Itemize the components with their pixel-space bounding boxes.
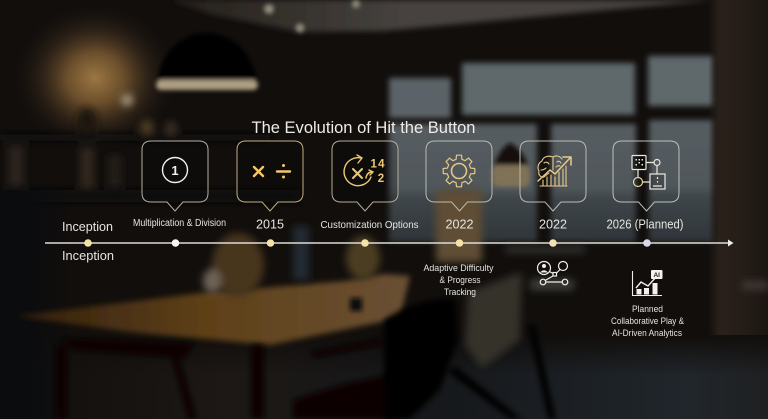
callout frame 1 <box>142 141 208 211</box>
background: floor <box>0 335 768 419</box>
background: warm column in window <box>436 190 482 262</box>
text block: planned collaborative play and AI analytics: AI-Driven Analytics <box>612 328 682 339</box>
icon: brain with growth chart <box>538 156 571 186</box>
background: table legs and chairs <box>56 338 400 419</box>
background: left dark edge <box>0 190 70 419</box>
text block: adaptive difficulty <box>424 263 494 298</box>
icon: AI analytics chart: AI <box>653 272 660 279</box>
timeline dots <box>84 239 651 247</box>
timeline axis with arrow <box>45 240 734 246</box>
text block: planned collaborative play and AI analytics: Planned <box>632 304 663 315</box>
icon: numbered circle: 1 <box>171 163 179 178</box>
background: white chair <box>465 272 522 368</box>
text block: planned collaborative play and AI analytics <box>611 304 685 339</box>
background: floor top fade <box>0 335 768 375</box>
icon: gear <box>443 155 475 187</box>
callout: customization options milestone <box>332 141 398 211</box>
icon: user network <box>538 262 568 285</box>
background: dome lamp <box>156 33 258 90</box>
background: pendant lamp reflection <box>492 143 530 187</box>
callout frame 2 <box>237 141 303 211</box>
callout: multiplication and division milestone <box>142 141 208 211</box>
callout frame 5 <box>520 141 586 211</box>
text block: adaptive difficulty: & Progress <box>440 275 481 286</box>
label: 2015: 2015 <box>256 216 284 232</box>
text block: adaptive difficulty: Tracking <box>444 287 476 298</box>
label: 2022 second: 2022 <box>539 216 567 232</box>
callout: progress tracking milestone <box>520 141 586 211</box>
icon: customization cycle: 2 <box>378 173 384 185</box>
title: The Evolution of Hit the Button <box>252 119 476 137</box>
background: right curtain <box>708 0 768 419</box>
text block: adaptive difficulty: Adaptive Difficulty <box>424 263 494 274</box>
callout frame 6 <box>613 141 679 211</box>
callout: adaptive difficulty milestone <box>426 141 492 211</box>
label: 2026 Planned: 2026 (Planned) <box>606 218 684 232</box>
callout: 2015 milestone <box>237 141 303 211</box>
icon: customization cycle <box>344 155 385 186</box>
label: Inception below the line: Inception <box>62 248 114 263</box>
icon: multiply and divide <box>254 164 290 178</box>
background: shelf and books <box>0 94 300 202</box>
label: Customization Options: Customization Options <box>320 219 418 231</box>
icon: customization cycle: 14 <box>370 158 385 170</box>
label: 2022 first: 2022 <box>446 216 474 232</box>
background: ceiling lights <box>264 0 360 32</box>
background: flower vase <box>203 226 380 297</box>
background: table top <box>16 274 410 345</box>
icon: AI analytics chart <box>632 270 662 296</box>
background: window panes <box>389 56 714 242</box>
label: Inception above the line: Inception <box>62 219 113 234</box>
callout frame 3 <box>332 141 398 211</box>
label: Multiplication and Division: Multiplication & Division <box>133 218 226 229</box>
text block: planned collaborative play and AI analytics: Collaborative Play & <box>611 316 685 327</box>
background: wall glow <box>13 4 177 152</box>
background: ceiling <box>170 0 768 32</box>
callout: collaborative and AI milestone <box>613 141 679 211</box>
icon: connected blocks <box>632 156 665 189</box>
background: dark chair <box>384 299 556 419</box>
background: far table strip <box>505 246 768 290</box>
callout frame 4 <box>426 141 492 211</box>
background: table cup <box>350 298 362 311</box>
